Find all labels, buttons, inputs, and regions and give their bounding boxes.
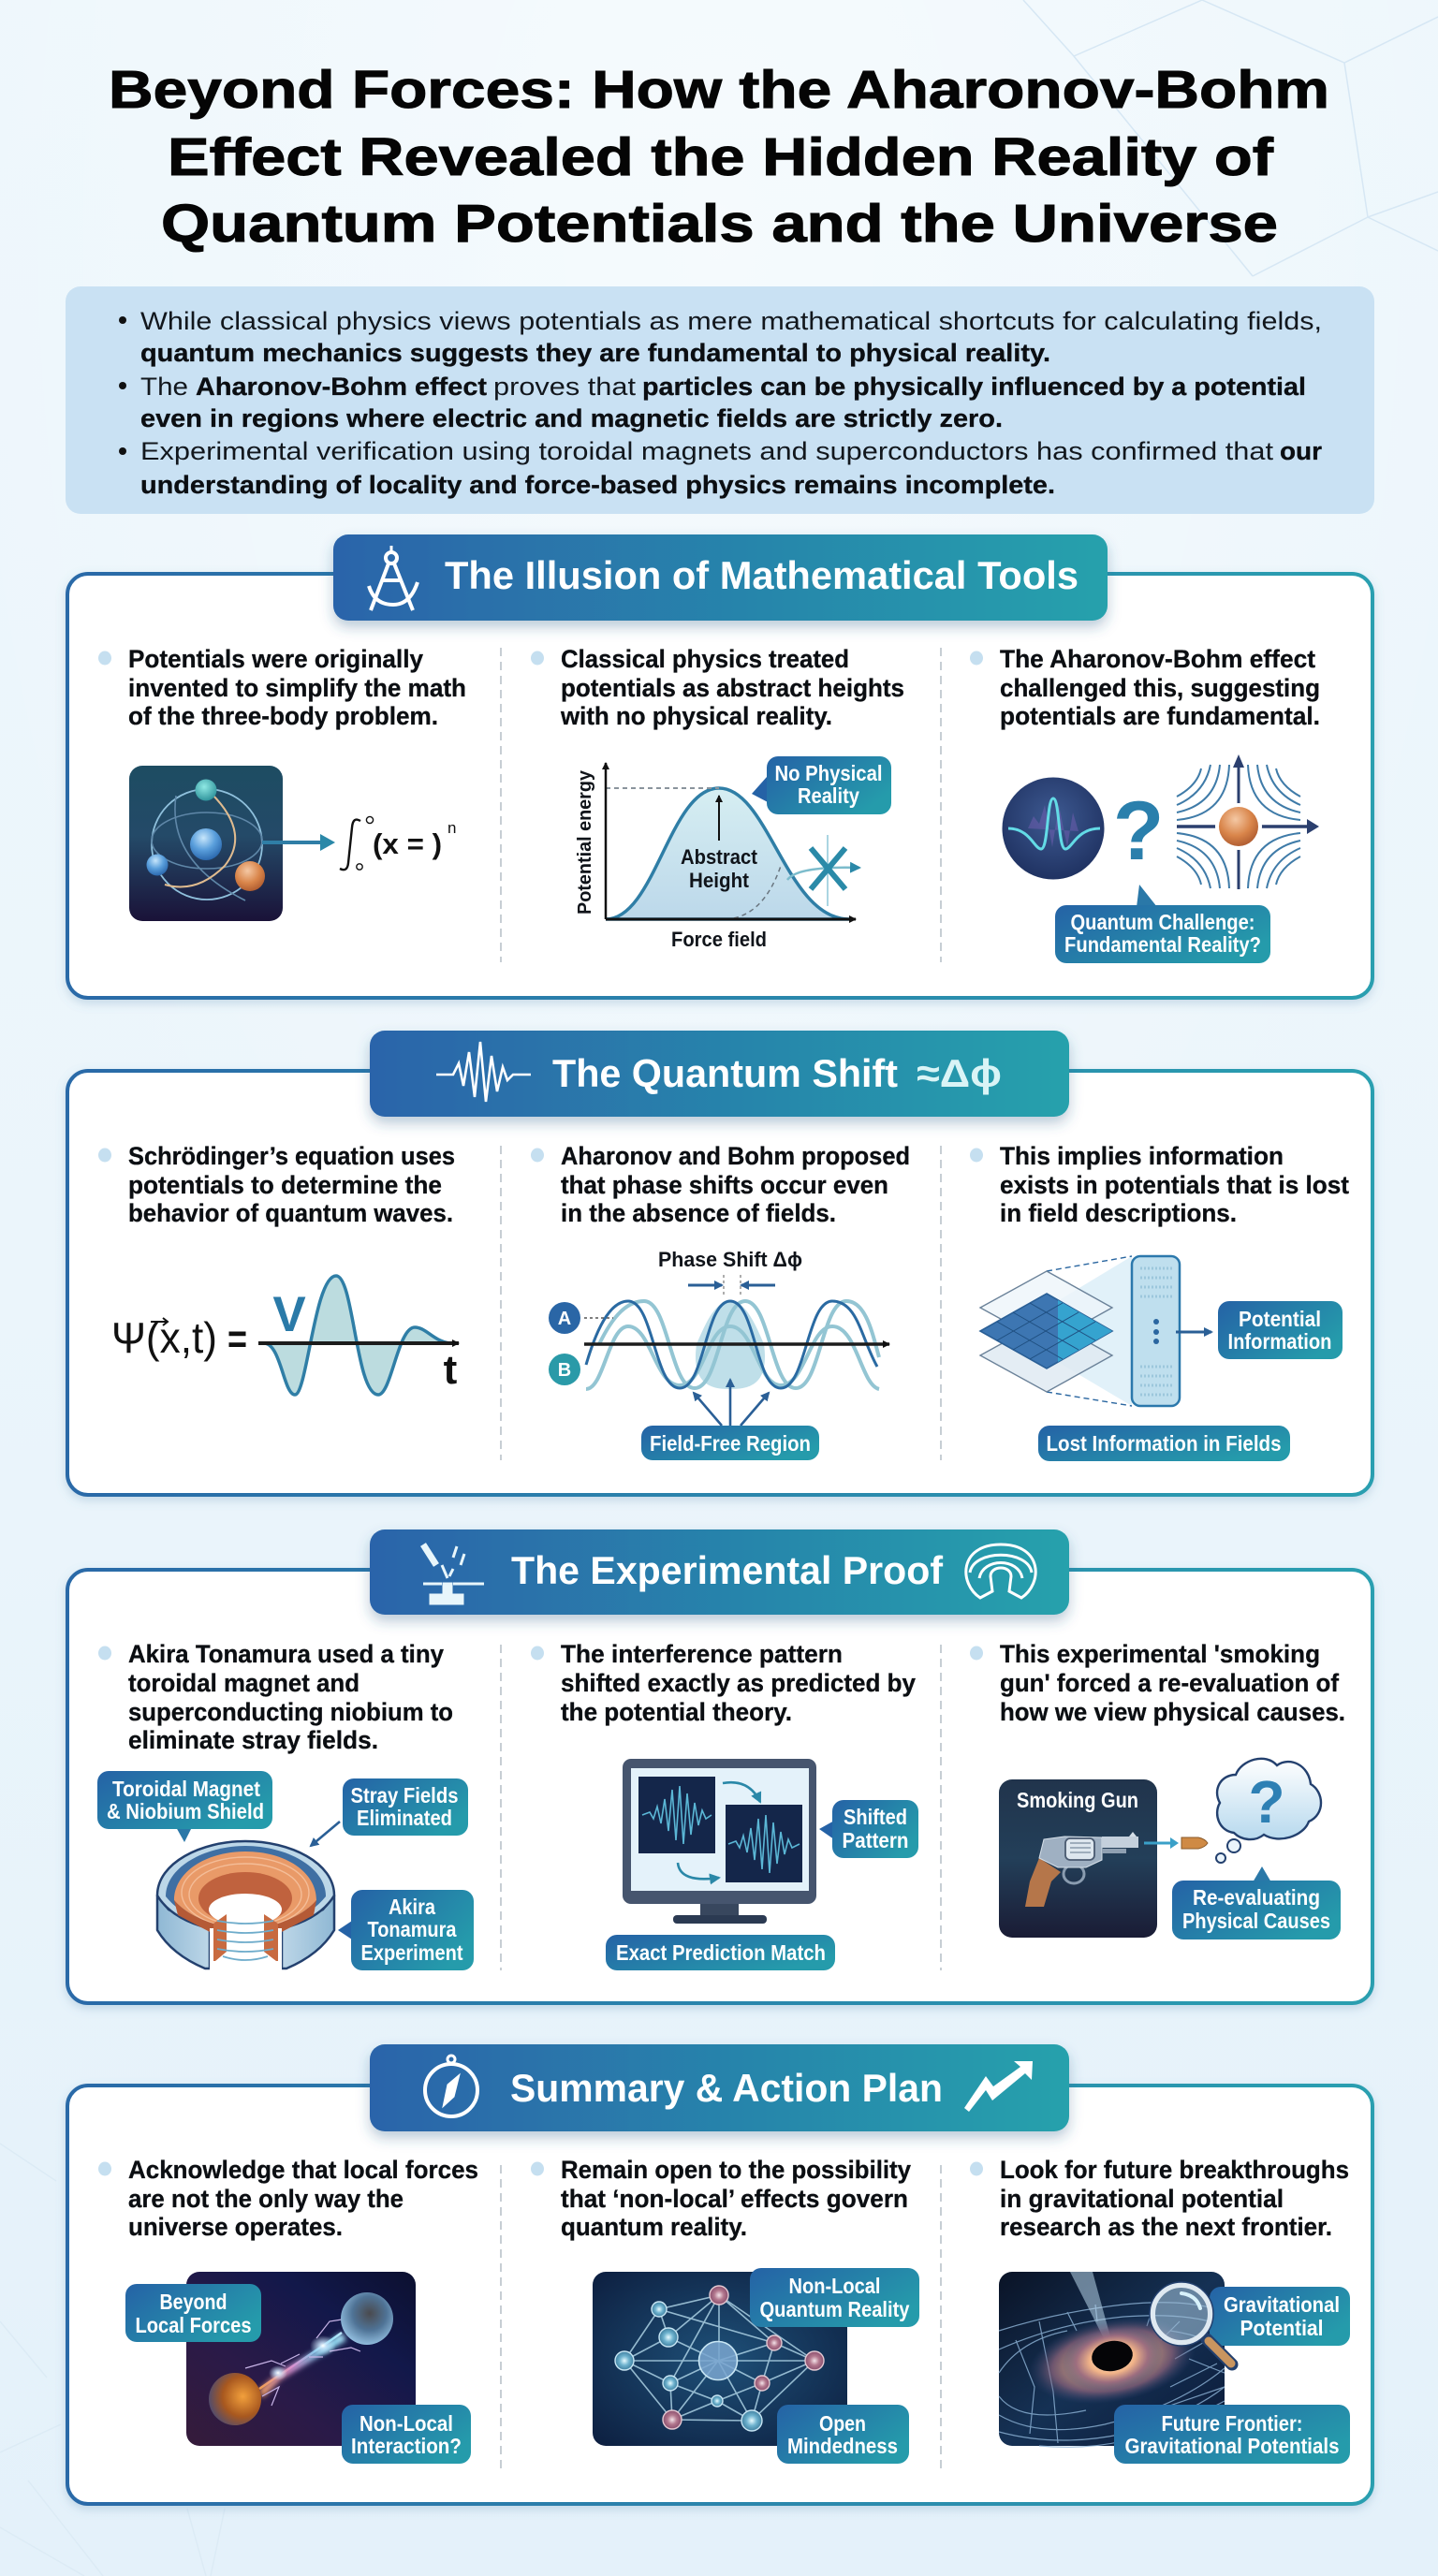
column: Tonamura experiment: superconducting niobium to [128, 1698, 453, 1726]
callout: Gravitational Potential: Gravitational [1224, 2292, 1340, 2317]
icon: lab apparatus [423, 1544, 484, 1603]
icon: magnifying glass [1150, 2282, 1232, 2364]
callout: Shifted Pattern: Pattern [843, 1828, 908, 1852]
icon: orbiting bodies [129, 766, 283, 921]
callout: Re-evaluating Physical Causes: Physical Causes [1182, 1909, 1330, 1933]
column: three-body problem: of the three-body problem. [128, 702, 438, 730]
diagram: stacked planes [980, 1256, 1211, 1406]
callout: Non-Local Interaction: Non-Local [360, 2411, 453, 2436]
icon: wave sphere [1002, 777, 1105, 880]
callout: Future Frontier [1114, 2405, 1350, 2464]
panel: key takeaways: our [1280, 437, 1323, 465]
callout: Non-Local Quantum Reality [750, 2268, 919, 2327]
banner: section 2 heading [370, 1031, 1069, 1117]
column: potential energy curve: potentials as abstract heights [561, 674, 904, 702]
column: quantum challenge: challenged this, suggesting [1000, 674, 1320, 702]
icon: field lines [1177, 754, 1319, 889]
callout: Gravitational Potential: Potential [1240, 2316, 1324, 2340]
icon: thought cloud [1216, 1759, 1321, 1863]
callout: Akira Tonamura Experiment: Experiment [361, 1940, 463, 1965]
column: three-body problem: Potentials were originally [128, 645, 423, 673]
callout: No Physical Reality: Reality [798, 783, 859, 808]
column: local forces [98, 2156, 478, 2464]
column: gravitational frontier: Look for future breakthroughs [1000, 2156, 1349, 2184]
callout: Non-Local Interaction [342, 2405, 471, 2464]
callout: Gravitational Potential [1210, 2287, 1350, 2346]
column: Schrodinger equation: behavior of quantum waves. [128, 1199, 453, 1227]
callout: Re-evaluating Physical Causes [1172, 1866, 1341, 1939]
column: lost information: exists in potentials that is lost [1000, 1171, 1349, 1199]
illustration: smoking gun [999, 1779, 1208, 1938]
icon: thought cloud: ? [1248, 1768, 1285, 1836]
equation: Ψ(x,t) [111, 1313, 217, 1362]
label: Exact Prediction Match [606, 1935, 835, 1970]
callout: No Physical Reality: No Physical [775, 761, 882, 785]
chart: wave function: V [272, 1287, 306, 1342]
callout: Toroidal Magnet and Niobium Shield: & Niobium Shield [107, 1799, 264, 1823]
column: non-local effects: that ‘non-local’ effects govern [561, 2185, 908, 2213]
column: local forces: Acknowledge that local forces [128, 2156, 478, 2184]
callout: Future Frontier: Future Frontier: [1161, 2411, 1303, 2436]
column: interference pattern: The interference pattern [561, 1640, 843, 1668]
column: interference pattern: the potential theory. [561, 1698, 792, 1726]
panel: The Experimental Proof [67, 1530, 1372, 2003]
callout: Beyond Local Forces: Local Forces [135, 2313, 251, 2337]
icon: question mark: ? [1113, 783, 1164, 877]
label: Exact Prediction Match: Exact Prediction Match [616, 1940, 826, 1965]
illustration: smoking gun: Smoking Gun [1017, 1788, 1138, 1812]
column: smoking gun: gun' forced a re-evaluation of [1000, 1669, 1340, 1697]
callout: Shifted Pattern [819, 1800, 918, 1858]
callout: Re-evaluating Physical Causes: Re-evaluating [1193, 1885, 1320, 1910]
column: interference pattern [531, 1640, 918, 1970]
banner: section 4 heading [370, 2044, 1069, 2131]
column: gravitational frontier [970, 2156, 1350, 2464]
icon: rising arrow [964, 2061, 1033, 2112]
chart: potential energy: Force field [671, 928, 767, 951]
chart: potential energy: Potential energy [575, 769, 595, 915]
illustration: quantum network [593, 2272, 847, 2446]
column: non-local effects: quantum reality. [561, 2213, 747, 2241]
banner: section 2 heading: The Quantum Shift [552, 1051, 898, 1095]
column: gravitational frontier: research as the next frontier. [1000, 2213, 1332, 2241]
title [109, 60, 1329, 254]
column: quantum challenge: The Aharonov-Bohm effect [1000, 645, 1315, 673]
callout: Quantum Challenge: Fundamental Reality? [1064, 932, 1261, 957]
illustration: black hole [999, 2272, 1225, 2447]
label: Lost Information in Fields: Lost Information in Fields [1047, 1431, 1281, 1456]
callout: Non-Local Quantum Reality: Quantum Reality [760, 2297, 910, 2321]
diagram: interfering waves: A [558, 1309, 571, 1329]
column: quantum challenge [970, 645, 1320, 963]
panel: Summary and Action Plan [67, 2044, 1372, 2504]
column: quantum challenge: potentials are fundamental. [1000, 702, 1320, 730]
callout: Toroidal Magnet and Niobium Shield: Toroidal Magnet [112, 1777, 260, 1801]
column: smoking gun [970, 1640, 1345, 1939]
icon: crossed-out arrow [787, 835, 859, 906]
column: interference pattern: shifted exactly as predicted by [561, 1669, 916, 1697]
column: lost information: This implies information [1000, 1142, 1284, 1170]
column: Schrodinger equation: potentials to determine the [128, 1171, 442, 1199]
column: Schrodinger equation: Schrödinger’s equation uses [128, 1142, 455, 1170]
column: potential energy curve [531, 645, 904, 951]
panel: key takeaways: understanding of locality and force-based physics remains incomplete. [140, 471, 1055, 499]
column: non-local effects: Remain open to the possibility [561, 2156, 911, 2184]
banner: section 3 heading [370, 1530, 1069, 1615]
label: Potential Information: Information [1228, 1329, 1331, 1354]
column: smoking gun: This experimental 'smoking [1000, 1640, 1320, 1668]
column: phase shift: Aharonov and Bohm proposed [561, 1142, 910, 1170]
callout: Non-Local Interaction: Interaction? [351, 2434, 462, 2458]
panel: The Illusion of Mathematical Tools [67, 534, 1372, 998]
title: Beyond Forces: How the Aharonov-Bohm [109, 60, 1329, 120]
banner: section 3 heading: The Experimental Proof [511, 1548, 944, 1592]
illustration: toroidal magnet [157, 1841, 334, 1971]
callout: Akira Tonamura Experiment: Tonamura [367, 1917, 457, 1941]
arrow [262, 834, 335, 851]
callout: Toroidal Magnet and Niobium Shield [97, 1771, 272, 1842]
panel: key takeaways: quantum mechanics suggests they are fundamental to physical reality. [140, 339, 1050, 367]
callout: Beyond Local Forces [125, 2284, 261, 2342]
label: Field-Free Region: Field-Free Region [650, 1431, 811, 1456]
chart: wave function [258, 1276, 459, 1395]
label: Potential Information [1218, 1301, 1343, 1359]
panel: key takeaways: even in regions where electric and magnetic fields are strictly zero. [140, 404, 1003, 432]
chart: potential energy: Abstract [681, 845, 758, 869]
callout: Akira Tonamura Experiment: Akira [389, 1895, 435, 1919]
diagram: interfering waves: Phase Shift Δϕ [658, 1248, 802, 1271]
callout: Stray Fields Eliminated [311, 1778, 468, 1846]
icon: drafting compass [369, 546, 418, 610]
illustration: entangled planets [186, 2272, 416, 2446]
label: Lost Information in Fields [1038, 1426, 1290, 1461]
column: smoking gun: how we view physical causes. [1000, 1698, 1345, 1726]
panel: key takeaways: Experimental verification using toroidal magnets and superconductors has confirmed that [140, 437, 1274, 465]
illustration: monitor [623, 1759, 816, 1924]
callout: Beyond Local Forces: Beyond [159, 2290, 227, 2314]
callout: Quantum Challenge [1055, 885, 1270, 963]
column: gravitational frontier: in gravitational potential [1000, 2185, 1284, 2213]
column: potential energy curve: with no physical reality. [560, 702, 832, 730]
callout: Open Mindedness: Mindedness [787, 2434, 898, 2458]
callout: Akira Tonamura Experiment [338, 1890, 474, 1970]
column: three-body problem [98, 645, 466, 921]
formula [340, 816, 456, 870]
callout: No Physical Reality [752, 756, 891, 814]
column: non-local effects [531, 2156, 919, 2464]
panel: key takeaways: proves that [493, 373, 637, 401]
column: Schrodinger equation [98, 1142, 459, 1395]
banner: section 1 heading [333, 534, 1108, 621]
column: potential energy curve: Classical physics treated [561, 645, 849, 673]
panel: key takeaways: The [140, 373, 188, 401]
formula: (x = ) [373, 827, 442, 860]
callout: Open Mindedness: Open [819, 2411, 866, 2436]
title: Effect Revealed the Hidden Reality of [168, 127, 1274, 187]
formula: n [448, 819, 456, 837]
equation: = [227, 1316, 247, 1362]
callout: Future Frontier: Gravitational Potentials [1125, 2434, 1339, 2458]
banner: section 1 heading: The Illusion of Mathematical Tools [445, 553, 1078, 597]
chart: potential energy: Height [689, 869, 750, 892]
label: Field-Free Region [641, 1426, 819, 1460]
column: Tonamura experiment [97, 1640, 474, 1971]
title: Quantum Potentials and the Universe [161, 194, 1278, 254]
column: lost information: in field descriptions. [1000, 1199, 1237, 1227]
diagram: interfering waves: B [558, 1360, 571, 1381]
diagram: interfering waves [549, 1248, 889, 1426]
icon: torus [966, 1544, 1035, 1598]
column: phase shift: that phase shifts occur even [561, 1171, 888, 1199]
column: local forces: are not the only way the [128, 2185, 404, 2213]
column: phase shift [531, 1142, 910, 1460]
chart: wave function: t [444, 1347, 458, 1393]
panel: key takeaways: Aharonov-Bohm effect [196, 373, 487, 401]
callout: Stray Fields Eliminated: Stray Fields [350, 1783, 459, 1808]
column: three-body problem: invented to simplify the math [128, 674, 466, 702]
column: Tonamura experiment: eliminate stray fields. [128, 1726, 378, 1754]
panel: key takeaways: While classical physics views potentials as mere mathematical shortcuts for calculating fields, [140, 307, 1322, 335]
callout: Quantum Challenge: Quantum Challenge: [1071, 910, 1255, 934]
chart: potential energy [575, 763, 856, 951]
column: Tonamura experiment: toroidal magnet and [128, 1669, 360, 1697]
icon: waveform [436, 1042, 531, 1102]
label: Potential Information: Potential [1239, 1307, 1321, 1331]
column: local forces: universe operates. [128, 2213, 343, 2241]
column: Tonamura experiment: Akira Tonamura used a tiny [128, 1640, 444, 1668]
column: lost information [970, 1142, 1349, 1461]
icon: compass [425, 2056, 477, 2116]
panel: key takeaways [66, 286, 1374, 514]
callout: Shifted Pattern: Shifted [844, 1805, 907, 1829]
panel: key takeaways: particles can be physically influenced by a potential [642, 373, 1306, 401]
callout: Non-Local Quantum Reality: Non-Local [788, 2274, 880, 2298]
panel: The Quantum Shift [67, 1031, 1372, 1495]
column: phase shift: in the absence of fields. [561, 1199, 836, 1227]
banner: section 4 heading: Summary & Action Plan [510, 2066, 943, 2110]
callout: Stray Fields Eliminated: Eliminated [357, 1806, 452, 1830]
callout: Open Mindedness [777, 2405, 909, 2464]
banner: section 2 heading: ≈Δϕ [917, 1051, 1002, 1095]
